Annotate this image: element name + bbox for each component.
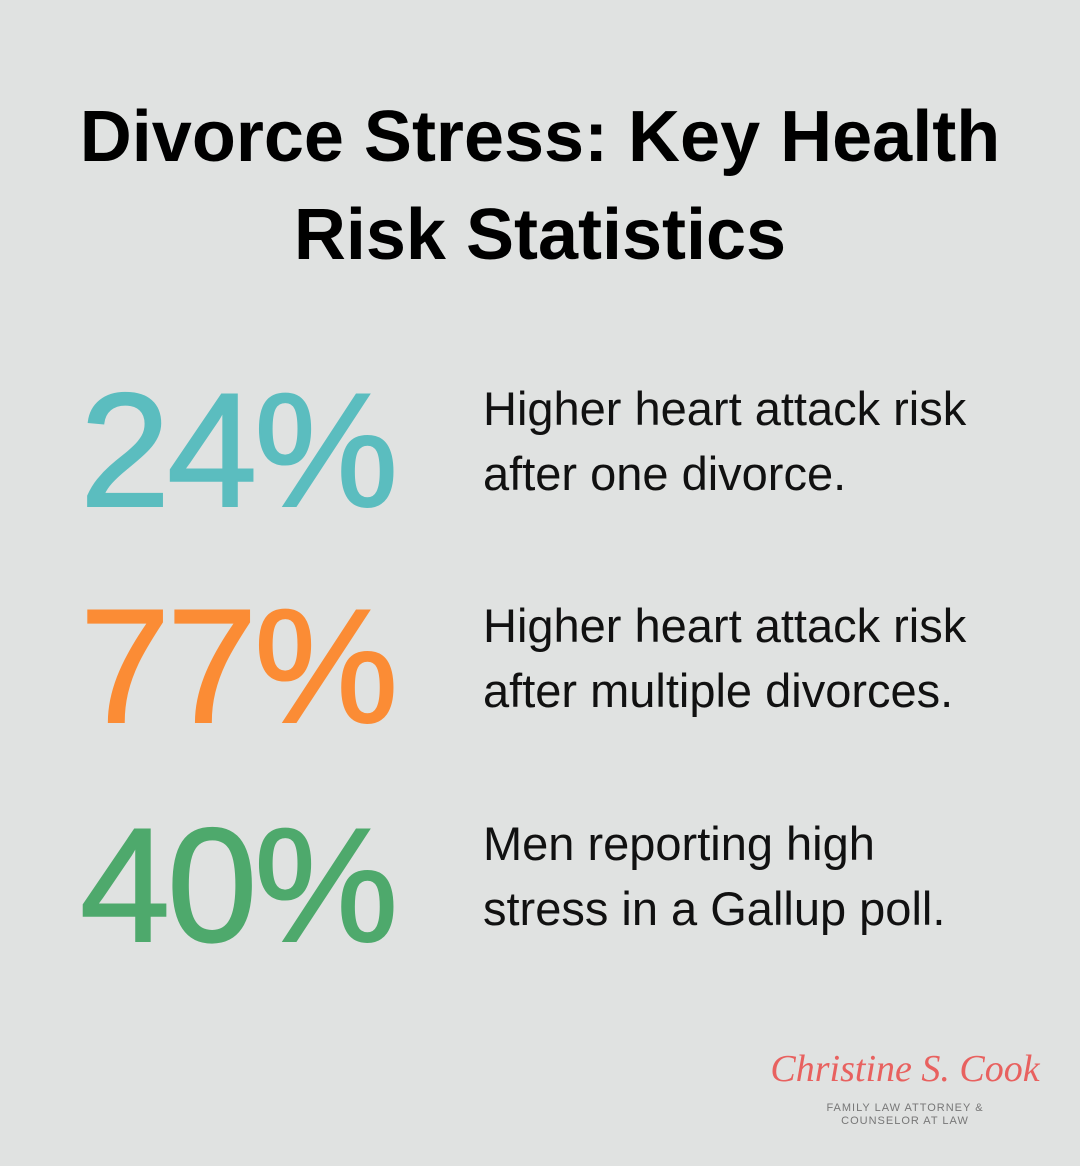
stat: 40%: 40% [80,795,395,976]
text: 77% description [483,599,966,717]
text: 40% description [483,817,945,935]
stat: 77%: 77% [80,576,395,757]
text: 77% description: Higher heart attack risk [483,599,966,652]
text: 24% description: Higher heart attack risk [483,382,966,435]
text: 40% description: Men reporting high [483,817,875,870]
logo: FAMILY LAW ATTORNEY & [826,1102,984,1114]
text: 77% description: after multiple divorces. [483,664,953,717]
title: Divorce Stress: Key Health [80,97,1000,177]
title [80,97,1000,275]
logo [770,1048,1040,1127]
logo: Christine S. Cook [770,1048,1040,1090]
title: Risk Statistics [294,195,786,275]
text: 24% description: after one divorce. [483,447,846,500]
logo: COUNSELOR AT LAW [841,1115,969,1127]
text: 40% description: stress in a Gallup poll. [483,882,945,935]
stat: 24%: 24% [80,360,395,541]
text: 24% description [483,382,966,500]
